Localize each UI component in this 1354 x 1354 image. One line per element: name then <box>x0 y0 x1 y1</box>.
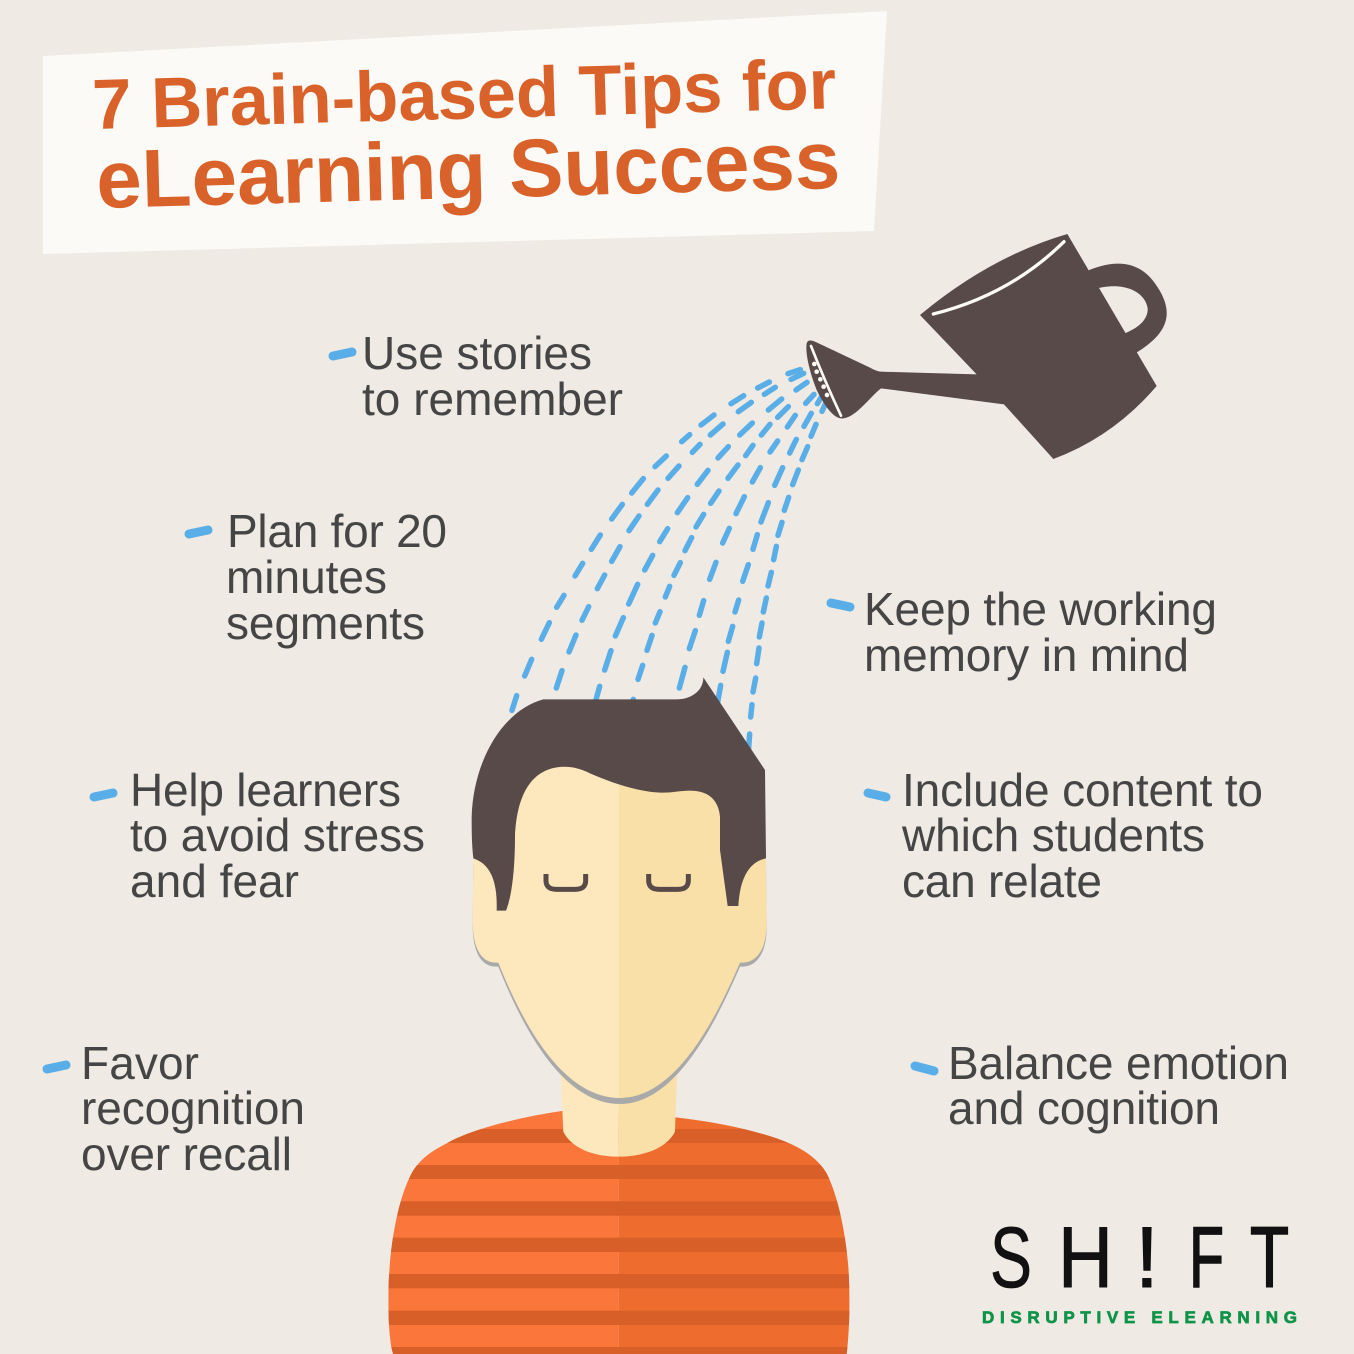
logo: SHIFT: S <box>990 1210 1032 1306</box>
tip: include content <box>868 764 1263 907</box>
tip: help learners: and fear <box>130 855 299 907</box>
tip: use stories: Use stories <box>362 327 592 379</box>
logo: SHIFT: F <box>1189 1210 1224 1306</box>
tip: favor recognition <box>47 1037 305 1180</box>
title line 1: 7 Brain-based Tips for <box>91 45 837 145</box>
tip: keep working memory: memory in mind <box>864 629 1189 681</box>
logo: SHIFT: ! <box>1135 1210 1159 1306</box>
tip: help learners <box>94 764 425 907</box>
hair <box>472 677 766 911</box>
tip: plan for 20 minutes <box>189 505 447 649</box>
logo tagline: DISRUPTIVE ELEARNING <box>982 1308 1297 1327</box>
tip: help learners: Help learners <box>130 764 401 816</box>
character: neck <box>560 1060 677 1157</box>
tip: include content: Include content to <box>902 764 1263 816</box>
left closed eye <box>546 874 586 889</box>
character: head <box>472 677 767 1104</box>
tip: favor recognition: recognition <box>81 1082 305 1134</box>
title line 2: eLearning Success <box>95 115 841 226</box>
tip: balance emotion: and cognition <box>948 1082 1220 1134</box>
tip: favor recognition: Favor <box>81 1037 199 1089</box>
tip: plan for 20 minutes: segments <box>226 597 425 649</box>
logo: SHIFT: T <box>1250 1210 1289 1306</box>
tip: balance emotion: Balance emotion <box>948 1037 1289 1089</box>
tip: include content: which students <box>901 809 1205 861</box>
tip: use stories: to remember <box>362 373 623 425</box>
tip: favor recognition: over recall <box>81 1128 292 1180</box>
tip: include content: can relate <box>902 855 1102 907</box>
character: shirt <box>388 1111 850 1354</box>
icon: watering can <box>806 234 1167 459</box>
tip: keep working memory: Keep the working <box>864 583 1217 635</box>
tip: plan for 20 minutes: Plan for 20 <box>227 505 447 557</box>
title banner <box>43 11 887 254</box>
tip: use stories <box>333 327 623 425</box>
logo: SHIFT: H <box>1058 1210 1113 1306</box>
water streams <box>512 370 826 752</box>
tip: plan for 20 minutes: minutes <box>226 551 387 603</box>
tip: help learners: to avoid stress <box>130 809 425 861</box>
tip: balance emotion <box>915 1037 1289 1134</box>
tip: keep working memory <box>831 583 1217 681</box>
logo: SHIFT <box>982 1210 1297 1327</box>
right closed eye <box>649 874 688 889</box>
